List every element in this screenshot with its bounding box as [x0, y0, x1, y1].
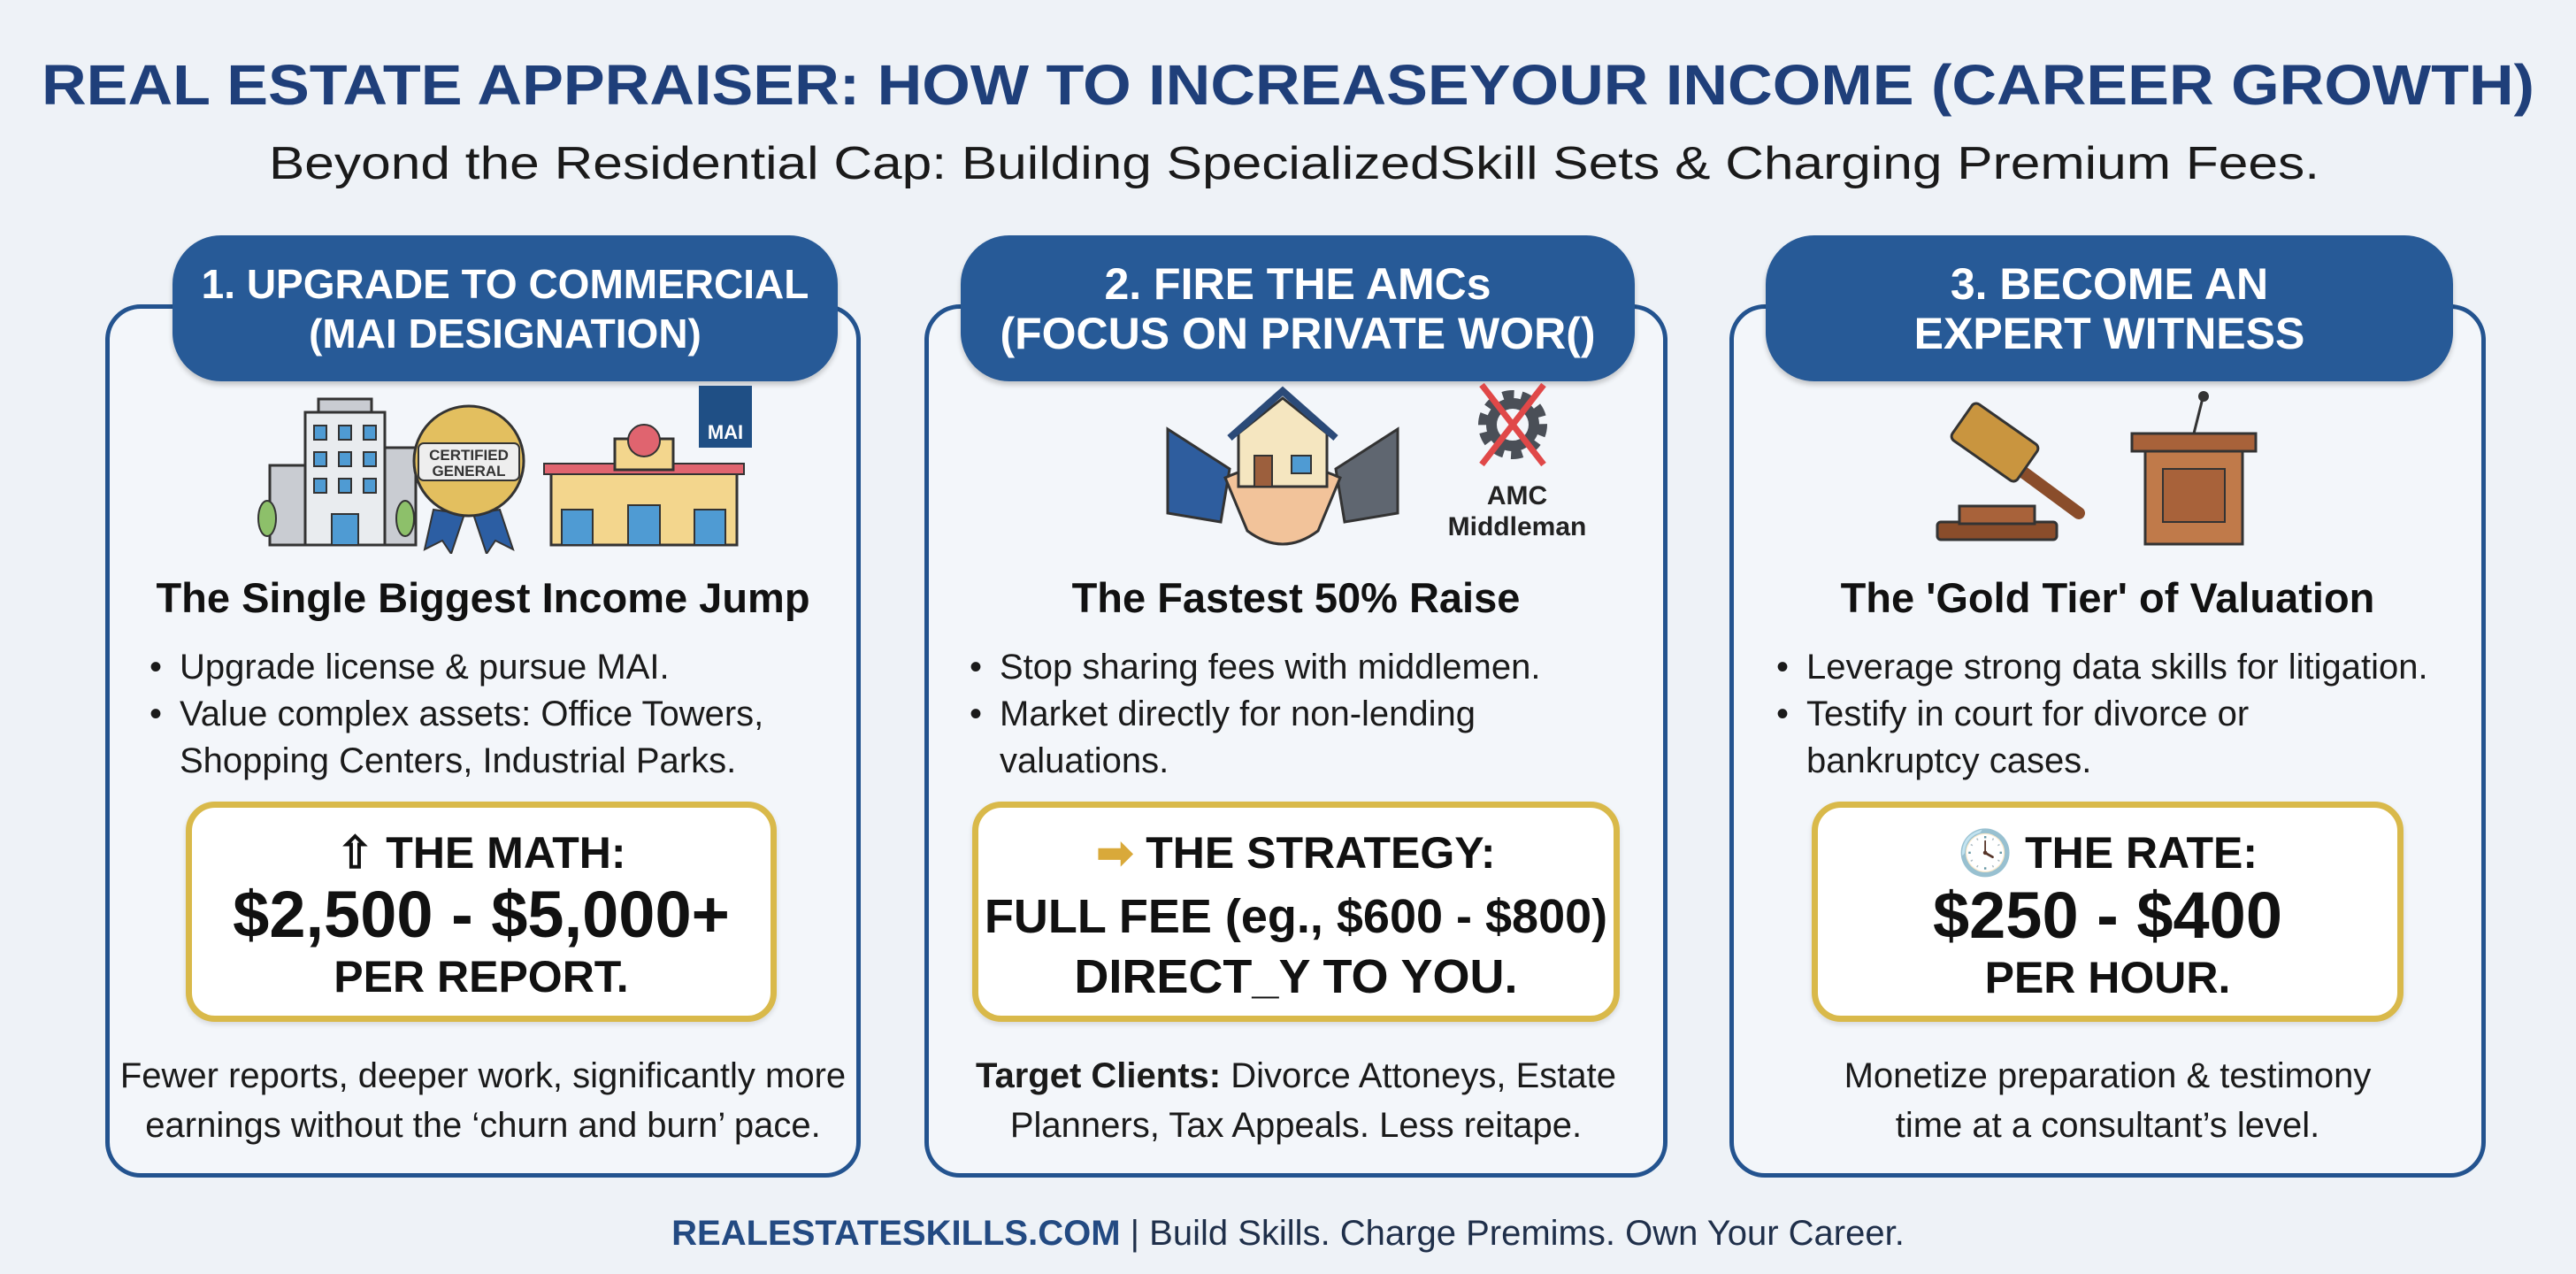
- bullets: expert witness: [1778, 648, 2428, 780]
- footnote: private work: Planners, Tax Appeals. Less reitape.: [1010, 1106, 1582, 1145]
- callout: the strategy: [972, 802, 1620, 1022]
- callout: the rate: PER HOUR.: [1985, 953, 2230, 1002]
- bullets: expert witness: bankruptcy cases.: [1806, 741, 2091, 780]
- icon: gavel and podium: [1936, 391, 2258, 545]
- footnote: expert witness: time at a consultant’s level.: [1896, 1106, 2319, 1145]
- footnote: private work: [976, 1056, 1616, 1145]
- footnote: commercial: earnings without the ‘churn and burn’ pace.: [145, 1106, 821, 1145]
- callout: the strategy: ➡ THE STRATEGY:: [1096, 828, 1496, 878]
- bullets: private work: Market directly for non-lending: [1000, 695, 1476, 733]
- panel header: commercial: (MAI DESIGNATION): [309, 310, 702, 356]
- subtitle: Beyond the Residential Cap: Building SpecializedSkill Sets & Charging Premium Fees.: [269, 138, 2319, 189]
- panel header: expert witness: EXPERT WITNESS: [1914, 308, 2304, 357]
- icon: buildings, badge, MAI: CERTIFIED: [429, 447, 509, 464]
- bullets: expert witness: Testify in court for divorce or: [1806, 695, 2249, 733]
- bullets: commercial: Shopping Centers, Industrial Parks.: [180, 741, 736, 780]
- panel: private work: [924, 304, 1668, 1178]
- callout: the strategy: DIRECT_Y TO YOU.: [1074, 950, 1518, 1003]
- callout: the math: [186, 802, 777, 1022]
- panel header: commercial: 1. UPGRADE TO COMMERCIAL: [202, 260, 809, 306]
- callout: the math: PER REPORT.: [334, 952, 629, 1002]
- callout: the strategy: FULL FEE (eg., $600 - $800): [985, 890, 1607, 943]
- panel header: private work: 2. FIRE THE AMCs: [1104, 258, 1491, 308]
- callout: the math: ⇧ THE MATH:: [336, 828, 626, 878]
- subheading: private work: The Fastest 50% Raise: [1072, 574, 1520, 621]
- callout: the rate: 🕓 THE RATE:: [1958, 828, 2258, 878]
- bullets: private work: [971, 648, 1540, 780]
- panel header: private work: (FOCUS ON PRIVATE WOR(): [1000, 308, 1596, 357]
- footer: REALESTATESKILLS.COM | Build Skills. Charge Premims. Own Your Career.: [671, 1214, 1905, 1253]
- subheading: commercial: The Single Biggest Income Jump: [156, 574, 810, 621]
- panel: expert witness: [1729, 304, 2486, 1178]
- panel header: expert witness: [1766, 235, 2453, 381]
- subheading: expert witness: The 'Gold Tier' of Valuation: [1841, 574, 2374, 621]
- callout: the math: $2,500 - $5,000+: [233, 878, 730, 951]
- title: REAL ESTATE APPRAISER: HOW TO INCREASEYOUR INCOME (CAREER GROWTH): [42, 53, 2534, 117]
- panel header: private work: [961, 235, 1635, 381]
- bullets: commercial: Value complex assets: Office Towers,: [180, 695, 763, 733]
- bullets: expert witness: Leverage strong data skills for litigation.: [1806, 648, 2428, 687]
- callout: the rate: [1812, 802, 2404, 1022]
- footnote: commercial: [120, 1056, 846, 1145]
- icon: buildings, badge, MAI: GENERAL: [432, 463, 506, 480]
- bullets: commercial: Upgrade license & pursue MAI.: [180, 648, 670, 687]
- bullets: private work: valuations.: [1000, 741, 1169, 780]
- icon: handshake and AMC crossed: AMC: [1487, 481, 1547, 510]
- panel header: commercial: [172, 235, 838, 381]
- icon: buildings, badge, MAI: MAI: [708, 421, 743, 443]
- bullets: private work: Stop sharing fees with middlemen.: [1000, 648, 1540, 687]
- bullets: commercial: [150, 648, 763, 780]
- callout: the rate: $250 - $400: [1933, 879, 2282, 952]
- footnote: expert witness: [1844, 1056, 2371, 1145]
- icon: handshake and AMC crossed: Middleman: [1448, 512, 1586, 541]
- footnote: expert witness: Monetize preparation & testimony: [1844, 1056, 2371, 1095]
- footnote: commercial: Fewer reports, deeper work, significantly more: [120, 1056, 846, 1095]
- panel header: expert witness: 3. BECOME AN: [1951, 258, 2268, 308]
- icon: handshake and AMC crossed: [1166, 382, 1586, 545]
- panel: commercial: [105, 304, 861, 1178]
- footnote: private work: Target Clients: Divorce Attoneys, Estate: [976, 1056, 1616, 1095]
- icon: buildings, badge, MAI: [257, 386, 752, 554]
